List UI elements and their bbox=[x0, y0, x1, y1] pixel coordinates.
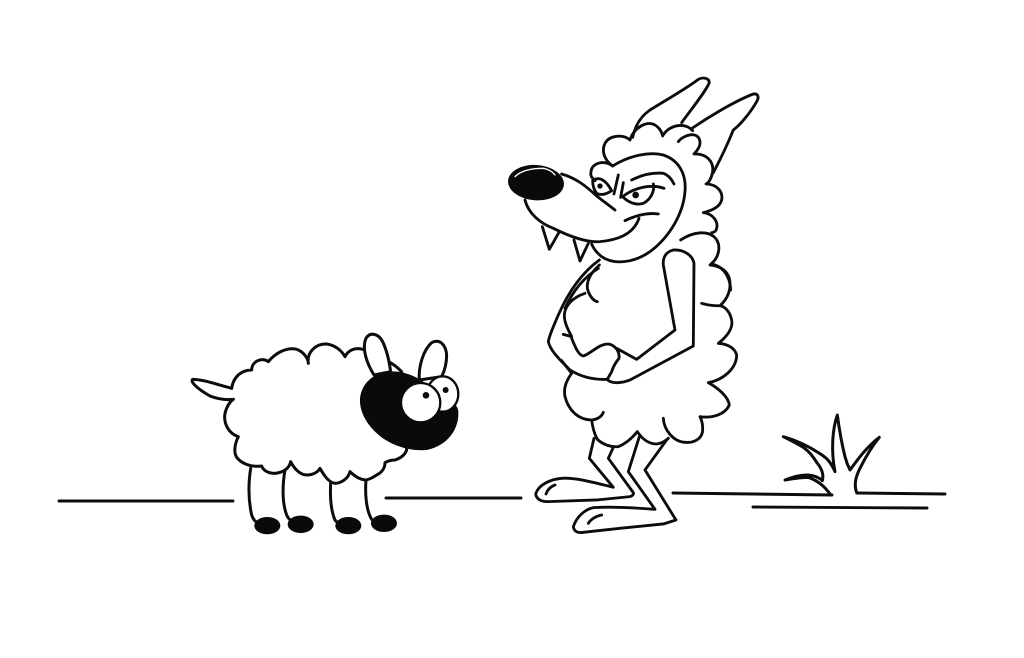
wolf snout bbox=[525, 174, 658, 242]
wolf teeth bbox=[542, 227, 588, 261]
wolf face outline bbox=[592, 154, 685, 262]
ground lines bbox=[59, 493, 945, 508]
wolf back line and left arm bbox=[548, 260, 607, 379]
wolf head wool bbox=[591, 124, 731, 290]
wolf front hands bbox=[572, 250, 694, 383]
wolf back leg and foot bbox=[536, 438, 633, 502]
wolf nose bbox=[507, 163, 565, 202]
wolf chest wool bbox=[563, 265, 599, 337]
sheep back eye bbox=[427, 376, 458, 412]
wolf front leg and foot bbox=[573, 437, 676, 533]
sheep hooves bbox=[254, 515, 397, 534]
sheep black head bbox=[360, 371, 458, 450]
sheep right ear bbox=[419, 341, 447, 380]
wolf left eye bbox=[593, 175, 623, 197]
wolf body bbox=[536, 250, 737, 533]
icon: grass tuft bbox=[783, 415, 879, 495]
wolf nose highlight bbox=[515, 168, 555, 177]
wolf bbox=[507, 78, 758, 533]
sheep tail bbox=[192, 379, 233, 400]
sheep left ear bbox=[364, 334, 391, 375]
wolf head bbox=[507, 78, 758, 290]
sheep front eye bbox=[401, 383, 440, 422]
wolf right eye and brow bbox=[623, 173, 674, 204]
sheep bbox=[192, 334, 458, 534]
wolf lower wool bbox=[562, 265, 737, 447]
sheep legs bbox=[249, 468, 380, 525]
wolf ears bbox=[633, 78, 758, 173]
sheep woolly body bbox=[225, 344, 407, 483]
